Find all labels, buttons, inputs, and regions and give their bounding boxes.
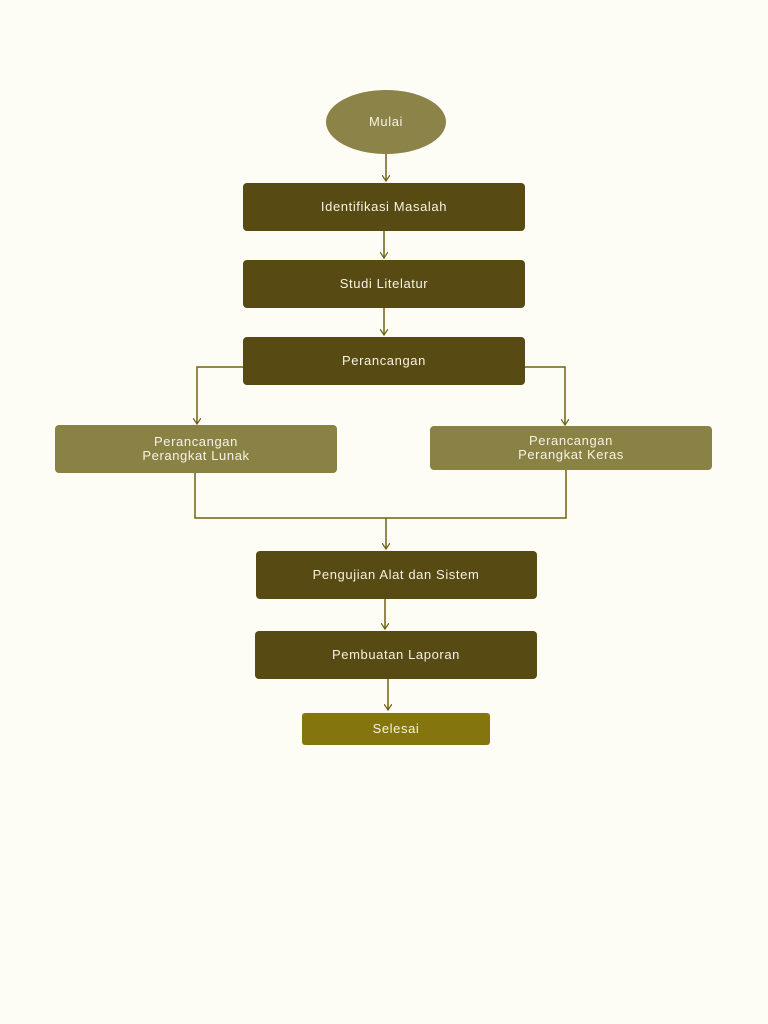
start: Mulai	[326, 90, 446, 154]
arrow	[384, 599, 386, 629]
step: Pengujian Alat dan Sistem	[256, 551, 537, 599]
arrow	[385, 154, 387, 181]
step: Perancangan Perangkat Lunak: Perancangan	[154, 434, 238, 449]
step: Perancangan Perangkat Keras	[430, 426, 712, 470]
arrow: merge	[195, 470, 566, 549]
end: Selesai	[302, 713, 490, 745]
start: Mulai: Mulai	[369, 114, 403, 129]
step: Perancangan Perangkat Lunak: Perangkat Lunak	[142, 448, 250, 463]
step: Identifikasi Masalah	[243, 183, 525, 231]
step: Perancangan Perangkat Lunak	[55, 425, 337, 473]
step: Perancangan Perangkat Keras: Perancangan	[529, 433, 613, 448]
arrow	[387, 679, 389, 710]
step: Perancangan Perangkat Keras: Perangkat Keras	[518, 447, 624, 462]
arrow	[383, 308, 385, 335]
step: Perancangan: Perancangan	[342, 353, 426, 368]
step: Identifikasi Masalah: Identifikasi Masalah	[321, 199, 447, 214]
arrow: split left	[197, 367, 243, 424]
step: Pembuatan Laporan: Pembuatan Laporan	[332, 647, 460, 662]
step: Studi Litelatur: Studi Litelatur	[340, 276, 428, 291]
arrow: split right	[525, 367, 565, 425]
arrow	[383, 231, 385, 258]
step: Perancangan	[243, 337, 525, 385]
step: Pembuatan Laporan	[255, 631, 537, 679]
step: Pengujian Alat dan Sistem: Pengujian Alat dan Sistem	[313, 567, 479, 582]
step: Studi Litelatur	[243, 260, 525, 308]
end: Selesai: Selesai	[373, 721, 419, 736]
